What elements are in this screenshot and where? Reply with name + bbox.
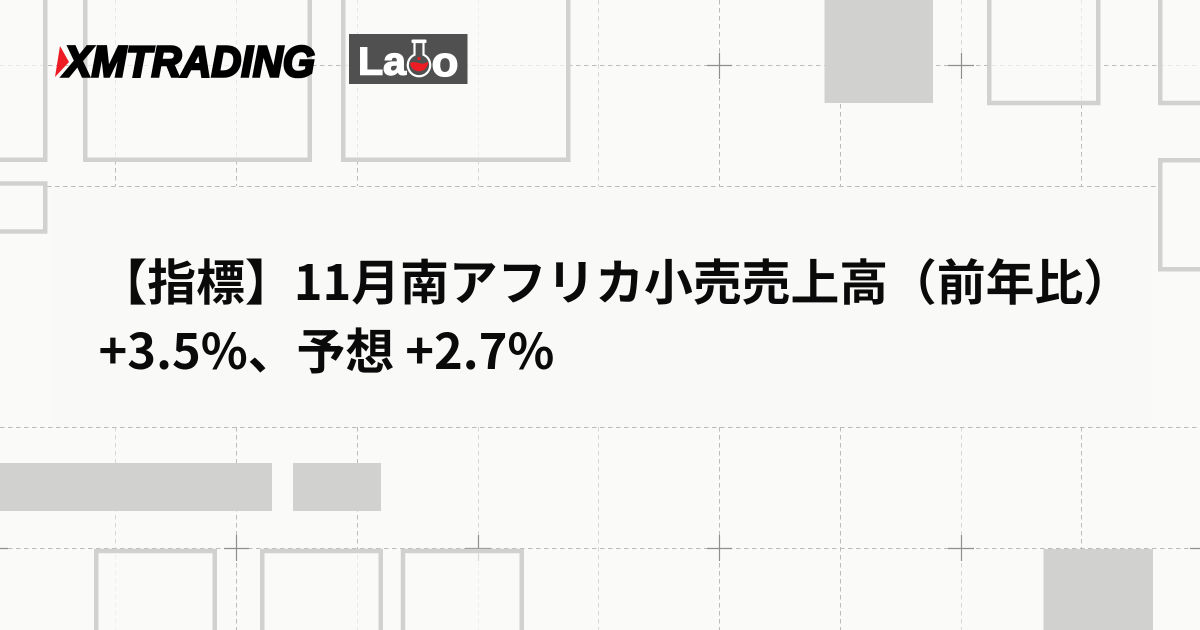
wordmark: XMTRADING	[61, 38, 315, 86]
logo letters La: La	[358, 40, 406, 84]
logo background	[349, 34, 468, 84]
title: 【指標】11月南アフリカ小売売上高（前年比）	[98, 244, 1132, 314]
title	[98, 244, 1132, 384]
logo letter o: o	[432, 38, 458, 85]
central panel	[52, 186, 1152, 427]
icon: red triangle	[55, 46, 69, 77]
icon: flask	[408, 40, 430, 76]
title: +3.5%、予想 +2.7%	[98, 313, 554, 384]
